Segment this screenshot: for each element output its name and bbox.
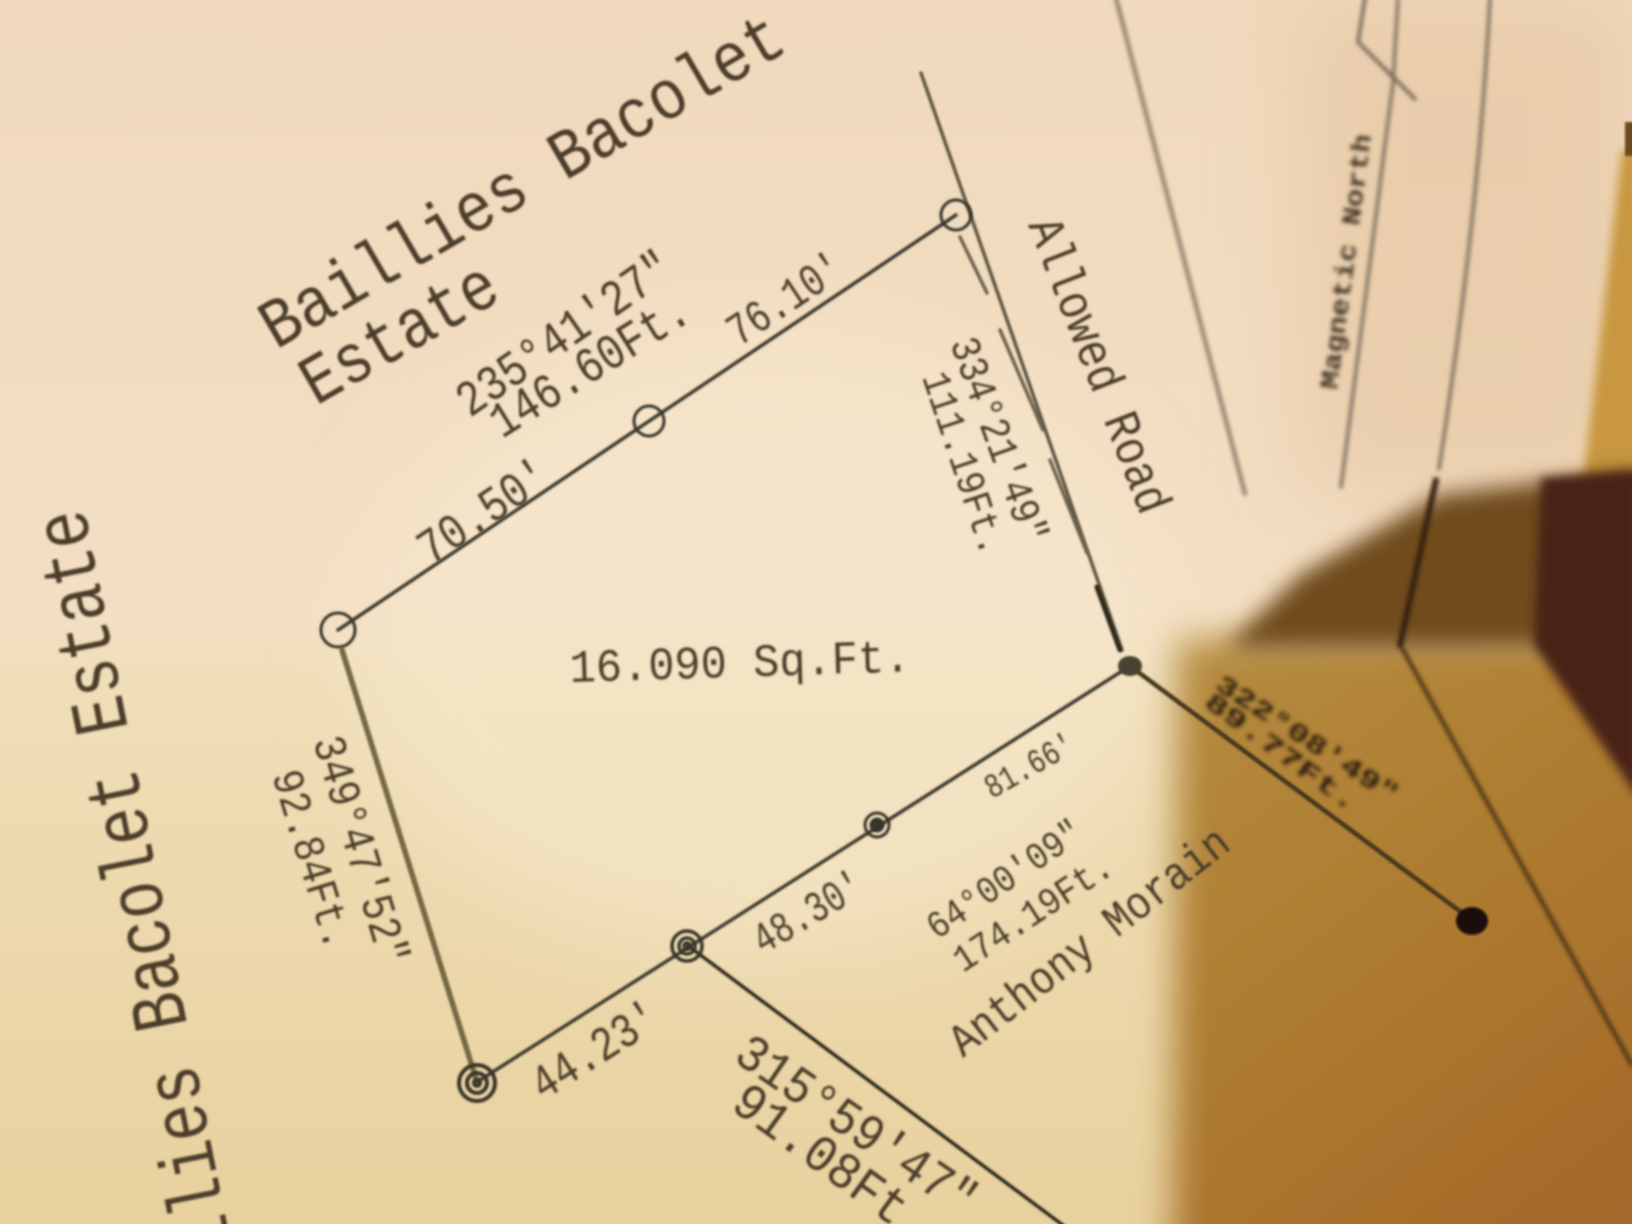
outer road line xyxy=(1116,0,1245,494)
survey points xyxy=(321,200,1488,1101)
golden shaded lower right area xyxy=(1172,640,1632,1224)
west boundary xyxy=(342,650,477,1082)
east bearing: 111.19Ft. xyxy=(910,367,1012,561)
segment length 76.10: 76.10' xyxy=(718,243,855,359)
segment length 81.66: 81.66' xyxy=(979,727,1083,809)
dark end of road line xyxy=(1097,587,1120,650)
neighbour name: Anthony Morain xyxy=(940,818,1241,1069)
broken inner east line xyxy=(960,237,1087,553)
concentric point south xyxy=(672,931,702,961)
lower right line xyxy=(1402,648,1632,1065)
dark corner at top right edge xyxy=(1625,122,1632,156)
long curved right line xyxy=(1439,0,1490,469)
north arrow head xyxy=(1358,0,1415,99)
concentric point SW xyxy=(459,1065,495,1101)
south bearing: 64°00'09" xyxy=(919,812,1092,950)
north bearing: 235°41'27" xyxy=(447,241,685,431)
magnetic north label: Magnetic North xyxy=(1315,132,1379,391)
segment length 48.30: 48.30' xyxy=(745,862,874,967)
west bearing: 92.84Ft. xyxy=(259,764,361,956)
small dark point east xyxy=(1118,656,1142,676)
lot line to far point xyxy=(1130,666,1473,921)
far lot bearing: 322°08'49" xyxy=(1210,670,1404,810)
east bearing: 334°21'49" xyxy=(938,331,1056,551)
dark fold segment of right line xyxy=(1400,480,1436,645)
far end dot xyxy=(1456,907,1488,935)
west bearing xyxy=(259,730,418,972)
north boundary xyxy=(338,215,956,630)
open point NE xyxy=(941,200,971,230)
segment length 44.23: 44.23' xyxy=(522,992,671,1114)
segment length 70.50: 70.50' xyxy=(408,449,563,579)
survey labels xyxy=(21,1,1241,1224)
cast shadow band xyxy=(1225,470,1632,648)
magnetic north line xyxy=(1341,0,1398,487)
north bearing: 146.60Ft. xyxy=(480,284,702,453)
land parcel boundary xyxy=(338,73,1473,1224)
allowed road: Allowed Road xyxy=(1013,210,1179,523)
table surface beyond paper edge xyxy=(1582,150,1632,490)
far lot bearing: 89.77Ft. xyxy=(1198,687,1363,818)
open point mid north xyxy=(634,406,664,436)
estate name top: Estate xyxy=(288,249,514,425)
blurred text at top right and lower right xyxy=(1198,132,1404,818)
parallel road lines and boundary lines at upper right xyxy=(1116,0,1632,1065)
far lot bearing xyxy=(1198,670,1404,818)
south bearing: 174.19Ft. xyxy=(946,846,1122,983)
adjoining lot line xyxy=(687,945,1064,1224)
road frontage line xyxy=(921,73,1122,650)
east bearing xyxy=(910,331,1056,561)
open point NW xyxy=(321,613,355,647)
very dark wedge at right xyxy=(1534,470,1632,800)
area: 16.090 Sq.Ft. xyxy=(569,633,911,696)
south boundary xyxy=(477,666,1130,1082)
dark point south mid xyxy=(865,813,889,837)
west bearing: 349°47'52" xyxy=(300,730,418,972)
